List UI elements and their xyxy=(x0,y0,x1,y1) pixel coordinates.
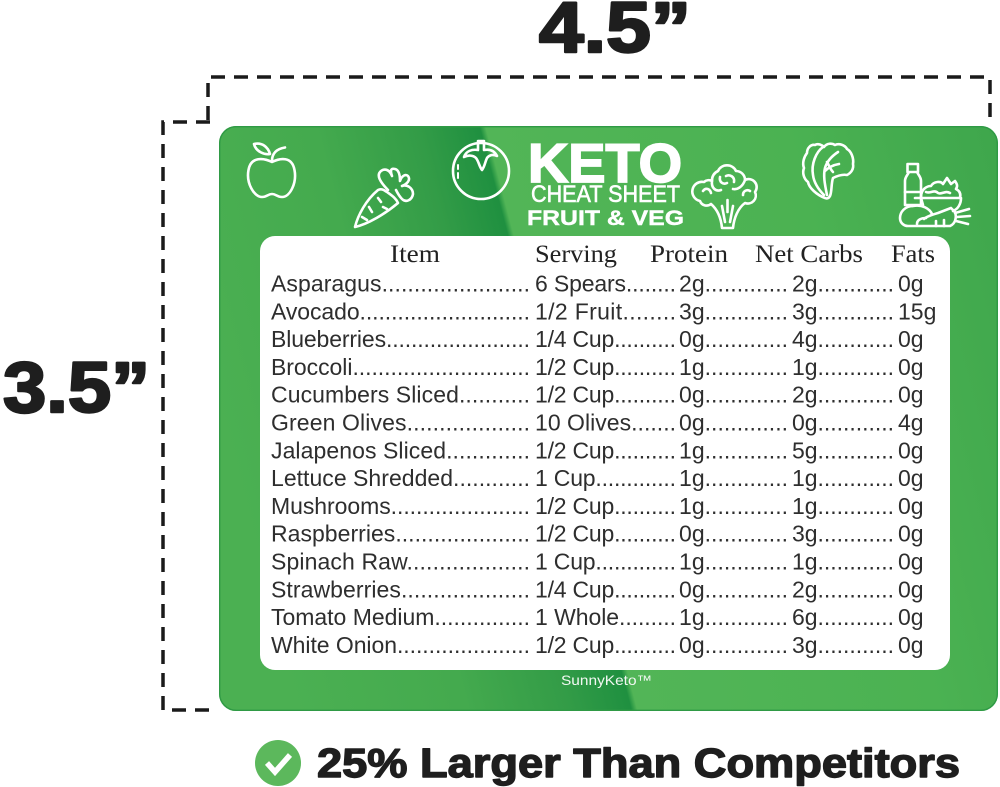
row: Strawberries: 2g............ xyxy=(792,576,894,602)
row: White Onion: White Onion..................... xyxy=(271,632,530,658)
row: Green Olives: 0g............. xyxy=(679,410,788,436)
row: Broccoli: Broccoli............................ xyxy=(271,354,530,380)
callout: 25% larger: 25% Larger Than Competitors xyxy=(317,740,960,786)
row: Blueberries: 4g............ xyxy=(792,326,894,352)
row: Green Olives: 0g............ xyxy=(792,410,894,436)
row: Cucumbers Sliced: 1/2 Cup.......... xyxy=(535,382,676,408)
row: Raspberries: Raspberries..................... xyxy=(271,521,530,547)
row: Cucumbers Sliced: 0g xyxy=(898,382,924,408)
row: Broccoli: 1g............. xyxy=(679,354,788,380)
row: Jalapenos Sliced: 1g............. xyxy=(679,437,788,463)
row: Tomato Medium: Tomato Medium............... xyxy=(271,604,530,630)
row: Avocado: 1/2 Fruit........ xyxy=(535,298,676,324)
row: Blueberries: Blueberries....................... xyxy=(271,326,530,352)
row: Avocado: 3g............. xyxy=(679,298,788,324)
row: Raspberries: 0g............. xyxy=(679,521,788,547)
row: Avocado: 3g............ xyxy=(792,298,894,324)
row: Jalapenos Sliced: Jalapenos Sliced............. xyxy=(271,437,530,463)
row: Cucumbers Sliced: Cucumbers Sliced........... xyxy=(271,382,530,408)
title: FRUIT & VEG xyxy=(527,207,684,230)
row: White Onion xyxy=(271,632,924,658)
row: Jalapenos Sliced: 5g............ xyxy=(792,437,894,463)
row: Jalapenos Sliced xyxy=(271,437,924,463)
row: Broccoli: 1g............ xyxy=(792,354,894,380)
row: Avocado: Avocado........................... xyxy=(271,298,530,324)
title: KETO xyxy=(528,132,682,194)
brand name: SunnyKeto™ xyxy=(561,672,652,688)
title xyxy=(527,132,684,230)
row: Raspberries xyxy=(271,521,924,547)
icon: groceries bag xyxy=(900,164,970,226)
panel: green cheat sheet card xyxy=(219,126,998,711)
row: Green Olives: Green Olives................... xyxy=(271,410,530,436)
table header row: Item xyxy=(390,241,441,268)
row: Asparagus: 2g............. xyxy=(679,270,788,296)
row: Lettuce Shredded xyxy=(271,465,924,491)
row: Strawberries xyxy=(271,576,924,602)
row: Strawberries: Strawberries.................... xyxy=(271,576,530,602)
row: Cucumbers Sliced: 2g............ xyxy=(792,382,894,408)
row: Spinach Raw: 1g............. xyxy=(679,548,788,574)
row: Spinach Raw xyxy=(271,548,924,574)
table header row: Fats xyxy=(891,241,935,268)
row: Tomato Medium xyxy=(271,604,924,630)
row: Blueberries: 0g xyxy=(898,326,924,352)
row: Raspberries: 1/2 Cup.......... xyxy=(535,521,676,547)
row: Broccoli: 1/2 Cup.......... xyxy=(535,354,676,380)
row: Mushrooms: 1g............ xyxy=(792,493,894,519)
icon: green check xyxy=(255,740,301,786)
row: Tomato Medium: 1g............. xyxy=(679,604,788,630)
row: Broccoli: 0g xyxy=(898,354,924,380)
icon: broccoli xyxy=(692,165,757,228)
row: Strawberries: 0g xyxy=(898,576,924,602)
row: Lettuce Shredded: 1g............. xyxy=(679,465,788,491)
row: Lettuce Shredded: 1 Cup............. xyxy=(535,465,676,491)
row: Asparagus: Asparagus....................... xyxy=(271,270,530,296)
width dimension: 4.5 inch xyxy=(208,0,990,122)
table header row: Protein xyxy=(650,241,729,268)
icon: lettuce leaf xyxy=(803,144,853,198)
row: Lettuce Shredded: Lettuce Shredded............ xyxy=(271,465,530,491)
row: Tomato Medium: 1 Whole......... xyxy=(535,604,676,630)
row: Broccoli xyxy=(271,354,924,380)
row: Avocado: 15g xyxy=(898,298,936,324)
row: Spinach Raw: 1g............ xyxy=(792,548,894,574)
row: Tomato Medium: 6g............ xyxy=(792,604,894,630)
table header row xyxy=(390,241,935,268)
row: Blueberries xyxy=(271,326,924,352)
row: Mushrooms: 1/2 Cup.......... xyxy=(535,493,676,519)
row: Spinach Raw: 0g xyxy=(898,548,924,574)
row: Jalapenos Sliced: 1/2 Cup.......... xyxy=(535,437,676,463)
row: Lettuce Shredded: 1g............ xyxy=(792,465,894,491)
row: Raspberries: 0g xyxy=(898,521,924,547)
row: Avocado xyxy=(271,298,936,324)
row: Blueberries: 1/4 Cup.......... xyxy=(535,326,676,352)
row: Asparagus xyxy=(271,270,924,296)
icon: apple xyxy=(248,144,295,197)
row: Asparagus: 2g............ xyxy=(792,270,894,296)
icon: carrot xyxy=(355,169,413,227)
row: Green Olives: 10 Olives....... xyxy=(535,410,676,436)
row: Mushrooms: Mushrooms...................... xyxy=(271,493,530,519)
row: Mushrooms xyxy=(271,493,924,519)
row: Tomato Medium: 0g xyxy=(898,604,924,630)
height dimension: 3.5 inch xyxy=(3,122,210,710)
row: Asparagus: 0g xyxy=(898,270,924,296)
row: White Onion: 0g............. xyxy=(679,632,788,658)
panel: nutrition table xyxy=(260,236,950,670)
icon: tomato xyxy=(453,141,509,199)
row: Mushrooms: 1g............. xyxy=(679,493,788,519)
row: Green Olives xyxy=(271,410,924,436)
row: Raspberries: 3g............ xyxy=(792,521,894,547)
row: Strawberries: 0g............. xyxy=(679,576,788,602)
row: Spinach Raw: 1 Cup............. xyxy=(535,548,676,574)
height dimension: 3.5 inch: 3.5” xyxy=(3,349,150,428)
row: White Onion: 1/2 Cup.......... xyxy=(535,632,676,658)
row: Lettuce Shredded: 0g xyxy=(898,465,924,491)
row: Mushrooms: 0g xyxy=(898,493,924,519)
row: Green Olives: 4g xyxy=(898,410,924,436)
row: Strawberries: 1/4 Cup.......... xyxy=(535,576,676,602)
table header row: Serving xyxy=(535,241,618,268)
row: White Onion: 3g............ xyxy=(792,632,894,658)
row: Cucumbers Sliced: 0g............. xyxy=(679,382,788,408)
row: Spinach Raw: Spinach Raw................... xyxy=(271,548,530,574)
row: Cucumbers Sliced xyxy=(271,382,924,408)
title: CHEAT SHEET xyxy=(531,181,680,208)
row: Blueberries: 0g............. xyxy=(679,326,788,352)
table header row: Net Carbs xyxy=(755,241,863,268)
row: Asparagus: 6 Spears........ xyxy=(535,270,676,296)
row: Jalapenos Sliced: 0g xyxy=(898,437,924,463)
row: White Onion: 0g xyxy=(898,632,924,658)
